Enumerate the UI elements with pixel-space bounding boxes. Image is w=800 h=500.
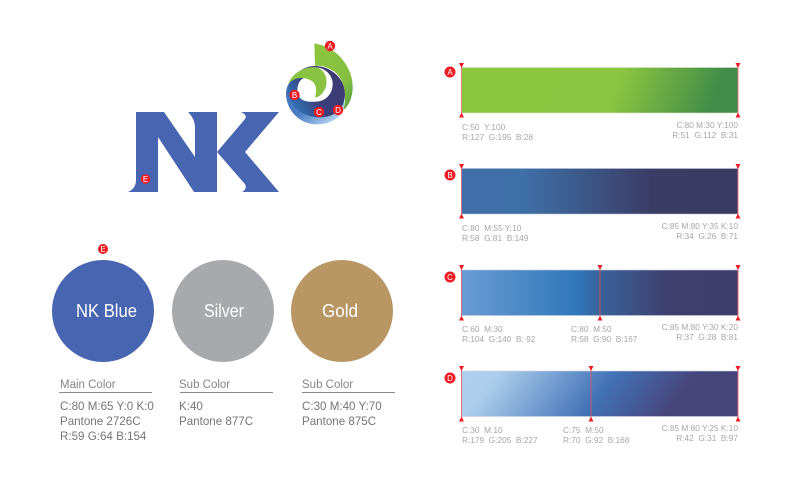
colour spec: silver [179, 379, 273, 428]
colour spec: main colour: C:80 M:65 Y:0 K:0 [60, 400, 154, 413]
badge E [141, 174, 150, 184]
badge A: A [327, 42, 333, 51]
swirl green hook [288, 67, 327, 98]
badge C: C [316, 108, 322, 117]
colour spec: silver: Pantone 877C [179, 415, 253, 428]
swatch: Silver [172, 260, 274, 362]
swirl dark blue layer [288, 66, 345, 117]
colour spec: gold: Pantone 875C [302, 415, 376, 428]
colour spec: gold: Sub Color [302, 379, 353, 391]
gradient panel B: R:34 G:26 B:71 [676, 231, 738, 241]
swatch: NK Blue: NK Blue [76, 301, 137, 321]
swatch: Gold: Gold [322, 301, 358, 321]
gradient panel C: C:80 M:50 [571, 324, 612, 334]
gradient panel B: R:58 G:81 B:149 [462, 233, 529, 243]
gradient panel B: C:85 M:80 Y:35 K:10 [662, 221, 738, 231]
gradient panel A: C:80 M:30 Y:100 [676, 120, 738, 130]
gradient panel C [444, 265, 740, 344]
gradient panel A: R:51 G:112 B:31 [672, 130, 738, 140]
gradient panel B [444, 164, 740, 243]
gradient panel D: R:70 G:92 B:168 [563, 435, 630, 445]
swatch: Gold [291, 260, 393, 362]
colour spec: main colour: Pantone 2726C [60, 415, 141, 428]
badge B: B [292, 91, 297, 100]
badge E above main colour [98, 244, 108, 254]
gradient panel A [444, 63, 740, 142]
gradient panel C: C:85 M:80 Y:30 K:20 [662, 322, 738, 332]
colour spec: main colour: R:59 G:64 B:154 [60, 430, 147, 443]
badge E above main colour: E [100, 245, 106, 254]
gradient panel D: R:179 G:205 B:227 [462, 435, 538, 445]
gradient panel D: C:75 M:50 [563, 425, 604, 435]
swatch: NK Blue [52, 260, 154, 362]
badge E: E [143, 175, 148, 184]
gradient panel C: R:37 G:28 B:81 [676, 332, 738, 342]
gradient panel C: C:60 M:30 [462, 324, 503, 334]
swatch: Silver: Silver [204, 301, 244, 321]
gradient panel C: R:58 G:90 B:167 [571, 334, 638, 344]
badge D: D [335, 106, 341, 115]
gradient panel D: D [447, 374, 453, 383]
logo wordmark: NK [128, 112, 279, 192]
colour spec: silver: Sub Color [179, 379, 230, 391]
gradient panel A: A [447, 68, 453, 77]
gradient panel D: C:85 M:80 Y:25 K:10 [662, 423, 738, 433]
gradient panel D: R:42 G:31 B:97 [676, 433, 738, 443]
colour spec: gold [302, 379, 395, 428]
gradient panel B: C:80 M:55 Y:10 [462, 223, 522, 233]
gradient panel B: B [447, 171, 453, 180]
colour spec: main colour: Main Color [60, 379, 116, 391]
swirl white spiral [297, 67, 333, 102]
gradient panel A: C:50 Y:100 [462, 122, 506, 132]
colour spec: gold: C:30 M:40 Y:70 [302, 400, 382, 413]
gradient panel A: R:127 G:195 B:28 [462, 132, 533, 142]
letters N and K [128, 112, 279, 192]
gradient panel D [444, 366, 740, 445]
swirl outer blue layer [286, 72, 344, 124]
logo symbol: swirl [286, 41, 353, 124]
gradient panel D: C:30 M:10 [462, 425, 503, 435]
gradient panel C: C [447, 273, 453, 282]
colour spec: main colour [59, 379, 154, 443]
colour spec: silver: K:40 [179, 400, 203, 413]
gradient panel C: R:104 G:140 B: 92 [462, 334, 536, 344]
swirl green tail [314, 43, 353, 110]
